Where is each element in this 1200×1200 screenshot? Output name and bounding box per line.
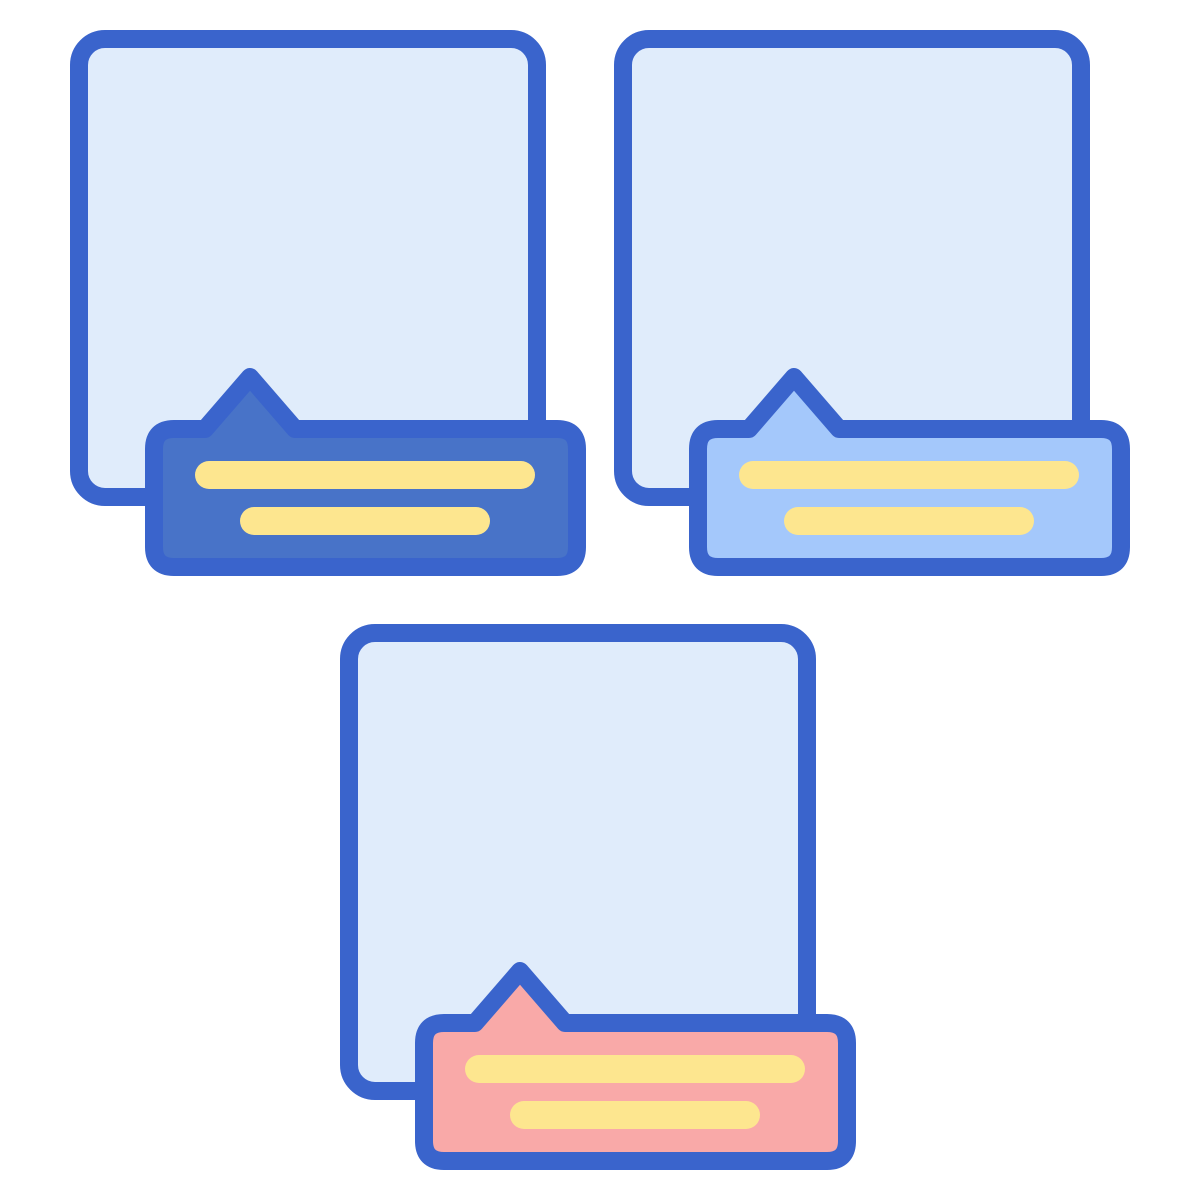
callout 2: [698, 377, 1121, 567]
panel 1: [79, 39, 577, 567]
panel 2: [623, 39, 1121, 567]
callout 1: [154, 377, 577, 567]
panel 3: [349, 633, 847, 1161]
callout 3: [424, 971, 847, 1161]
